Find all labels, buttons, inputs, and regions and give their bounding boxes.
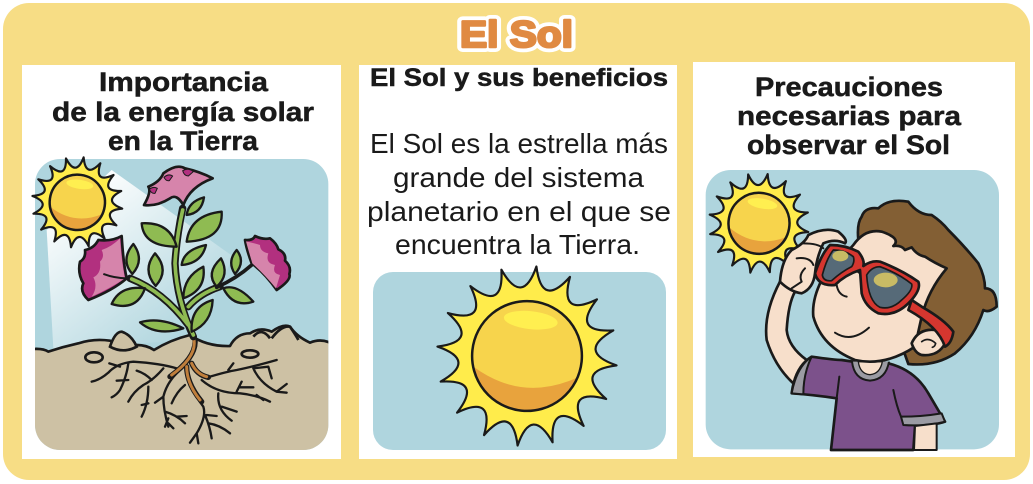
panel: importancia de la energía solar <box>22 65 341 459</box>
tap root <box>170 340 208 402</box>
title: El Sol <box>460 14 573 55</box>
collar <box>851 362 890 382</box>
heading: precauciones: observar el Sol <box>747 130 950 160</box>
text block: description: encuentra la Tierra. <box>395 229 640 260</box>
light beam <box>47 170 233 348</box>
hand <box>780 230 846 293</box>
stems <box>103 208 252 337</box>
heading: importancia: en la Tierra <box>108 126 258 156</box>
rocks <box>85 326 298 362</box>
hair <box>858 201 997 364</box>
illustration: plant with sun <box>26 151 330 453</box>
shirt <box>792 357 945 450</box>
sunglasses <box>908 300 953 347</box>
text block: description <box>367 128 671 260</box>
flowers <box>79 167 290 300</box>
icon: large sun <box>428 257 626 455</box>
arm <box>766 282 807 383</box>
heading: importancia <box>52 67 314 156</box>
heading: precauciones: Precauciones <box>755 72 943 102</box>
mouth and nose <box>835 271 869 337</box>
heading: beneficios: El Sol y sus beneficios <box>370 64 668 92</box>
heading: precauciones <box>737 72 961 160</box>
heading: importancia: Importancia <box>99 67 268 97</box>
ear <box>912 330 945 355</box>
title: El Sol <box>460 14 573 55</box>
sleeve cuffs <box>792 357 812 394</box>
text block: description: El Sol es la estrella más <box>370 128 668 159</box>
illustration background <box>373 272 666 450</box>
panel: el sol y sus beneficios <box>359 64 677 459</box>
leaves <box>112 197 253 332</box>
illustration: boy with sunglasses <box>701 165 999 450</box>
text block: description: grande del sistema <box>393 162 645 193</box>
heading: precauciones: necesarias para <box>737 101 961 131</box>
face <box>813 231 947 362</box>
text block: description: planetario en el que se <box>367 196 671 227</box>
panel: precauciones <box>693 62 1015 457</box>
roots <box>92 360 287 443</box>
heading: importancia: de la energía solar <box>52 97 314 127</box>
lower arm <box>914 423 937 450</box>
icon: sun <box>701 165 817 281</box>
soil <box>33 326 330 453</box>
icon: sun <box>26 151 129 254</box>
